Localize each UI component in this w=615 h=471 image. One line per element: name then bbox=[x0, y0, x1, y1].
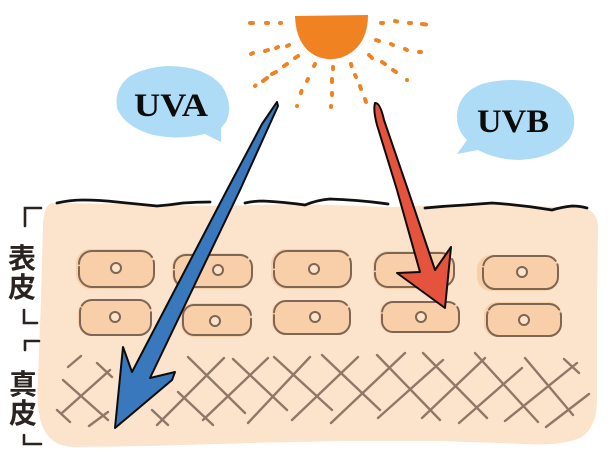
bracket top bbox=[25, 208, 41, 226]
arrow: UVA blue bbox=[115, 102, 278, 428]
UVB label: UVB bbox=[477, 104, 549, 140]
bubble shape bbox=[117, 66, 229, 142]
dermis text: 真 bbox=[9, 369, 37, 400]
cell nuclei bbox=[110, 263, 529, 326]
cell outlines bbox=[79, 251, 561, 336]
epidermis cells bbox=[76, 249, 562, 337]
dermis crosshatch fibers bbox=[57, 353, 589, 427]
label: epidermis bracket and text bbox=[8, 208, 41, 323]
bracket bottom bbox=[24, 310, 37, 323]
skin surface line bbox=[57, 199, 587, 210]
bracket top bbox=[25, 341, 39, 350]
icon: sun bbox=[250, 15, 426, 107]
speech bubble: UVB bbox=[457, 80, 574, 160]
epidermis text: 表 bbox=[8, 243, 36, 274]
UVA label: UVA bbox=[134, 88, 208, 124]
epidermis text: 皮 bbox=[8, 272, 36, 303]
dermis text: 皮 bbox=[9, 398, 37, 429]
bubble shape bbox=[457, 80, 574, 160]
label: dermis bracket and text bbox=[9, 341, 41, 444]
cell fills bbox=[76, 249, 562, 337]
panel: skin cross-section bbox=[38, 199, 598, 447]
sun disc bbox=[295, 15, 368, 59]
bracket bottom bbox=[24, 435, 41, 444]
sun rays bbox=[250, 21, 426, 107]
skin background bbox=[38, 203, 598, 447]
speech bubble: UVA bbox=[117, 66, 229, 142]
arrow: UVB red bbox=[374, 103, 451, 308]
